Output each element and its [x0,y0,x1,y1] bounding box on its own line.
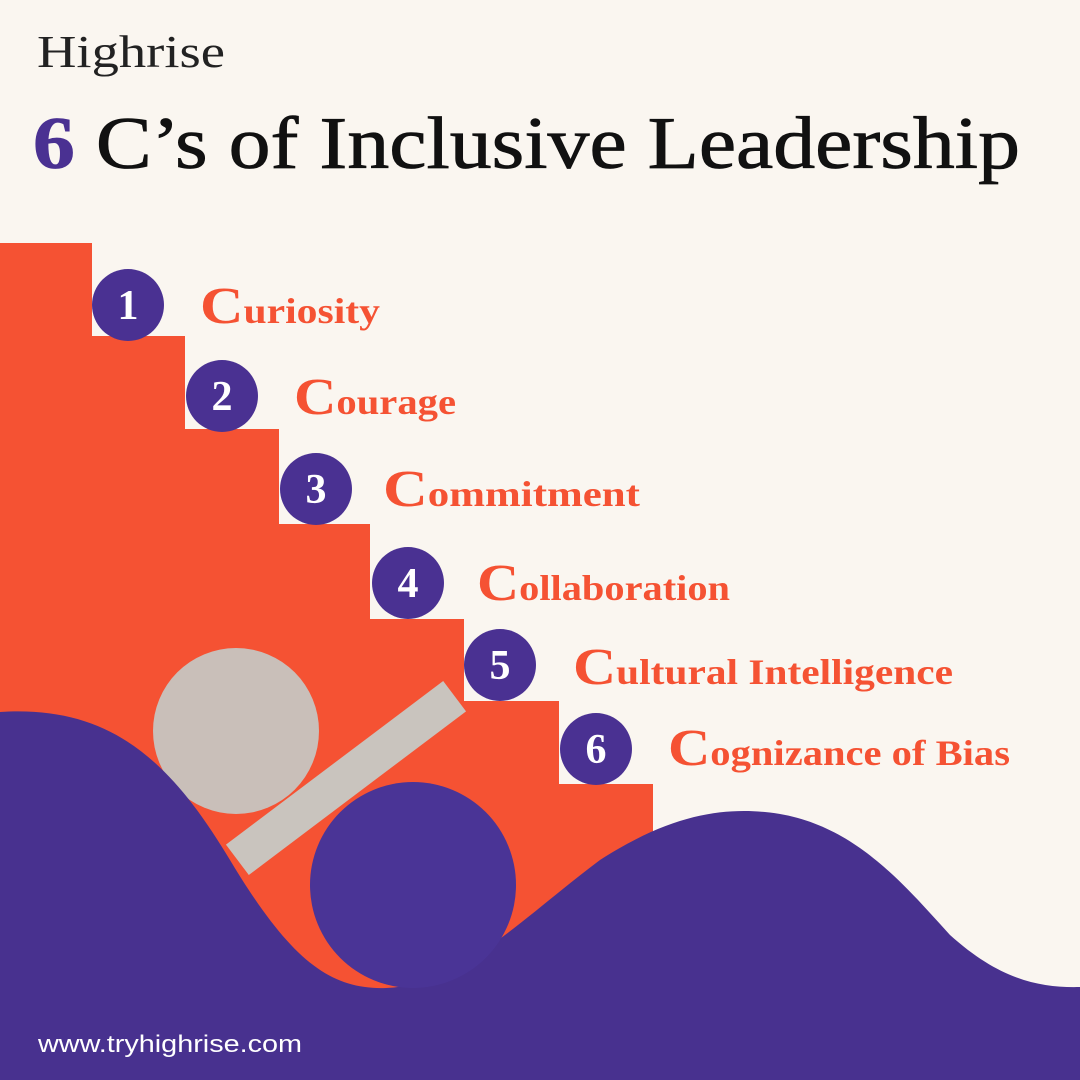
step items [92,269,1010,785]
item 2: 2 [212,374,232,420]
item 5: 5 [490,643,510,689]
item 3: Commitment [383,461,640,518]
staircase [0,243,653,1000]
item 3: 3 [306,467,326,513]
item 5: Cultural Intelligence [573,639,953,696]
item 1 [92,269,380,341]
item 4 [372,547,730,619]
website url: www.tryhighrise.com [37,1031,302,1058]
item 6: 6 [586,727,606,773]
item 4: 4 [398,561,418,607]
item 1: 1 [118,283,138,329]
purple circle [310,782,516,988]
gray circle [153,648,319,814]
item 2: Courage [294,369,456,426]
item 6 [560,713,1010,785]
gray bar [226,681,466,875]
item 6: Cognizance of Bias [668,720,1010,777]
brand name: Highrise [37,26,225,77]
item 5 [464,629,953,701]
item 4: Collaboration [477,555,730,612]
item 1: Curiosity [200,278,380,335]
item 3 [280,453,640,525]
purple wave [0,711,1080,1080]
item 2 [186,360,456,432]
title: 6 C’s of Inclusive Leadership [33,103,1020,185]
